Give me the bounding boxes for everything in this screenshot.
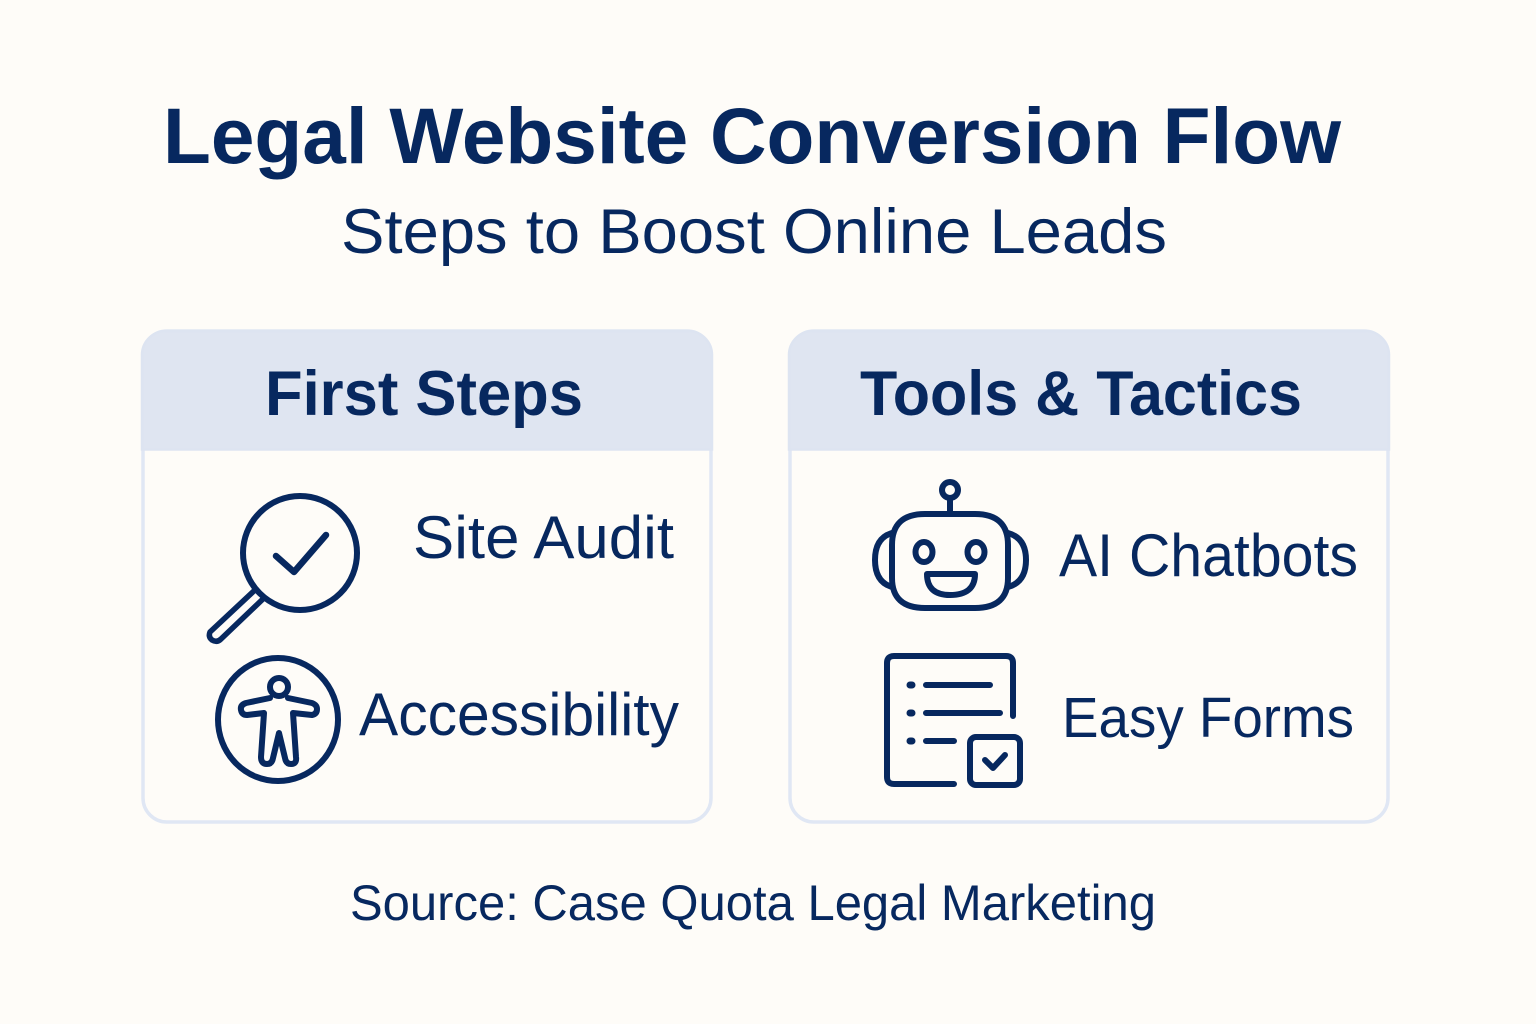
- panel header: tools and tactics: [789, 331, 1389, 450]
- icon: magnifier with check: [209, 496, 357, 641]
- panel header: first steps: [142, 331, 712, 450]
- heading: first steps: First Steps: [265, 359, 583, 429]
- icon: accessibility: [218, 658, 338, 781]
- label: ai chatbots: AI Chatbots: [1059, 522, 1358, 589]
- title: Legal Website Conversion Flow: [163, 91, 1342, 180]
- icon: form with checkbox: [887, 656, 1020, 785]
- subtitle: Steps to Boost Online Leads: [341, 197, 1167, 267]
- source line: Source: Case Quota Legal Marketing: [350, 875, 1156, 931]
- label: site audit: Site Audit: [413, 504, 674, 571]
- label: easy forms: Easy Forms: [1062, 686, 1354, 750]
- panel: tools and tactics: [789, 331, 1389, 822]
- heading: tools and tactics: Tools & Tactics: [860, 359, 1302, 429]
- panel: first steps: [142, 331, 712, 822]
- icon: robot: [875, 482, 1026, 608]
- label: accessibility: Accessibility: [359, 681, 679, 748]
